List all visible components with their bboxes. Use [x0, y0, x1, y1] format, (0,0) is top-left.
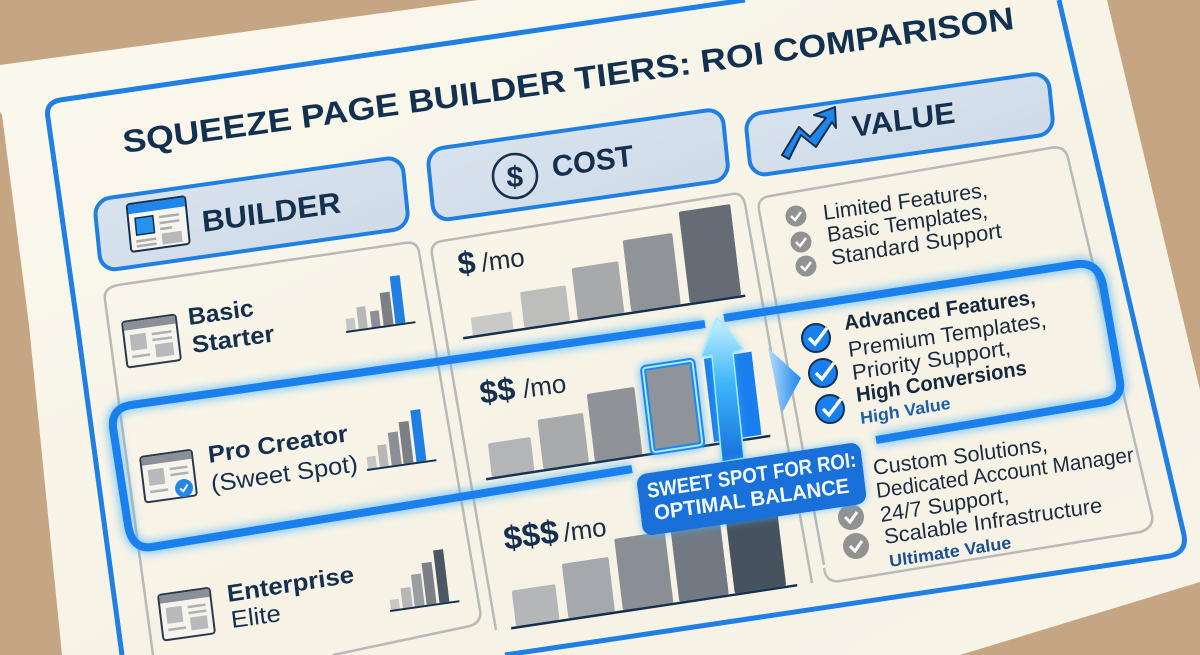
value header label: VALUE: [850, 97, 957, 144]
checks: blue: [802, 324, 844, 423]
line: priority support: Priority Support,: [851, 336, 1012, 385]
builder header label: BUILDER: [200, 187, 342, 239]
line: ultimate value: Ultimate Value: [888, 533, 1012, 571]
icon: browser window: [127, 196, 190, 252]
icon: pro browser with badge: [140, 450, 197, 503]
mini bar chart: pro: [361, 408, 437, 471]
pro creator label: Pro Creator: [206, 420, 349, 469]
line: basic templates: Basic Templates,: [826, 199, 989, 247]
blue cost bar behind arrow: [704, 352, 762, 442]
row: pro creator: [140, 408, 437, 503]
panel: builder header: [94, 156, 409, 271]
basic label: Basic: [186, 295, 255, 331]
bar chart: cost row 2: [478, 367, 770, 480]
starter label: Starter: [190, 321, 276, 359]
line: standard support: Standard Support: [830, 219, 1003, 270]
line: premium templates: Premium Templates,: [847, 308, 1048, 362]
enterprise label: Enterprise: [225, 561, 355, 608]
cost row 2 price: $$/mo: [478, 363, 568, 411]
icon: dollar coin: [493, 154, 537, 198]
highlighted cost bar: [643, 361, 703, 452]
highlight band glow: [113, 264, 1120, 547]
callout: sweet spot for ROI: [636, 442, 867, 536]
bar chart: cost row 1: [452, 203, 745, 339]
line: 24/7 support: 24/7 Support,: [879, 483, 1010, 527]
arrow: right pointing triangle: [768, 348, 801, 413]
line: custom solutions: Custom Solutions,: [872, 432, 1049, 480]
line: advanced features: Advanced Features,: [843, 286, 1037, 335]
cost row 3 price: $$$/mo: [501, 506, 608, 557]
value row 2 list: [802, 286, 1048, 428]
callout box: [636, 442, 867, 536]
row: enterprise elite: [158, 548, 460, 641]
arrow: sweet spot upward: [701, 318, 744, 462]
cost header label: COST: [550, 140, 635, 184]
panel: value column outline: [759, 147, 1152, 581]
line: high conversions: High Conversions: [855, 357, 1028, 407]
icon: rising arrow: [782, 107, 836, 159]
line: limited features: Limited Features,: [822, 178, 989, 225]
mini bar chart: basic: [340, 274, 416, 333]
highlight band: pro row: [113, 264, 1120, 547]
cost row 1 price: $/mo: [456, 237, 526, 282]
checks: gray large: [838, 504, 869, 559]
line: dedicated account manager: Dedicated Account Manager: [875, 443, 1135, 503]
title: SQUEEZE PAGE BUILDER TIERS: ROI COMPARISON: [121, 0, 1016, 160]
value row 3 list: [838, 432, 1135, 571]
bar chart: cost row 3: [499, 483, 797, 629]
mini bar chart: enterprise: [384, 548, 460, 612]
row: basic starter: [122, 274, 416, 368]
callout line 2: OPTIMAL BALANCE: [653, 475, 851, 525]
icon: enterprise browser: [158, 588, 215, 641]
icon: dollar coin: $: [506, 161, 524, 194]
value row 1 list: [786, 178, 1003, 276]
callout line 1: SWEET SPOT FOR ROI:: [646, 449, 857, 503]
panel: builder column outline: [105, 243, 480, 655]
panel: cost header: [427, 108, 729, 221]
panel: value header: [745, 72, 1054, 176]
elite label: Elite: [229, 600, 282, 634]
callout glow: [636, 442, 867, 536]
icon: basic browser: [122, 314, 181, 368]
line: scalable infrastructure: Scalable Infrastructure: [883, 493, 1103, 549]
panel: cost column outline: [432, 194, 812, 630]
line: high value: High Value: [859, 394, 952, 428]
sweet spot label: (Sweet Spot): [209, 450, 359, 498]
checks: gray: [786, 206, 816, 276]
